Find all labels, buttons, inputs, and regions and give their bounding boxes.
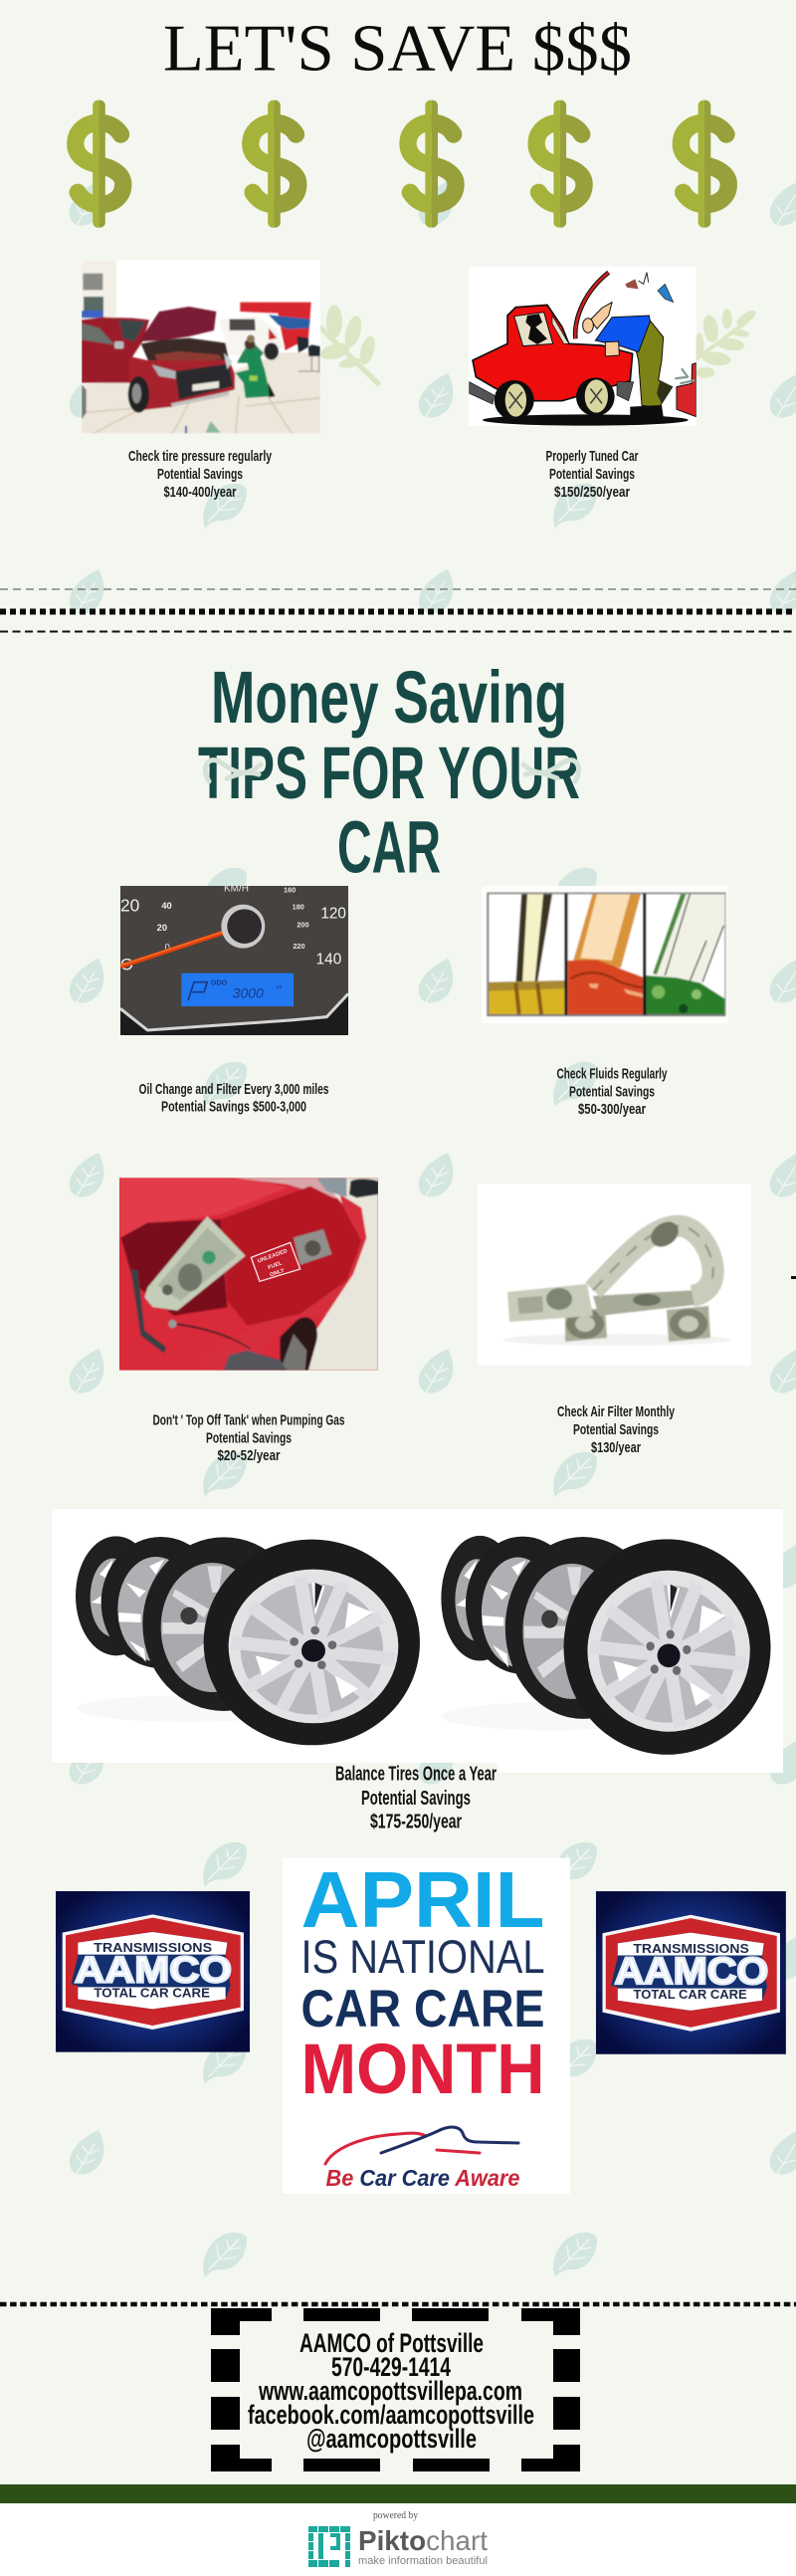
photo: odometer gauge: 0 bbox=[165, 942, 170, 952]
logo: AAMCO left: AAMCO bbox=[75, 1949, 232, 1991]
caption: air filter: $130/year bbox=[591, 1439, 641, 1456]
caption: air filter: Potential Savings bbox=[573, 1421, 659, 1438]
footer: powered by Piktochart: powered by bbox=[373, 2510, 418, 2521]
photo: three engine fluids bbox=[482, 886, 728, 1023]
contact details: @aamcopottsville bbox=[306, 2424, 477, 2454]
caption: oil change: Potential Savings $500-3,000 bbox=[161, 1099, 306, 1115]
photo: car made of money bbox=[478, 1183, 751, 1366]
poster: April is National Car Care Month: CAR CARE bbox=[300, 1980, 545, 2039]
photo background: tires white panels bbox=[52, 1509, 783, 1773]
caption: top off tank: $20-52/year bbox=[217, 1447, 281, 1464]
caption: check tire pressure: $140-400/year bbox=[163, 484, 237, 501]
photo: odometer gauge: 160 bbox=[284, 885, 296, 894]
caption: properly tuned car: $150/250/year bbox=[554, 484, 630, 501]
logo: AAMCO right: AAMCO bbox=[615, 1949, 768, 1992]
photo: odometer gauge: 220 bbox=[293, 942, 305, 951]
contact details: AAMCO of Pottsville bbox=[299, 2328, 484, 2358]
icon: left leafy branch bbox=[318, 305, 378, 383]
logo: AAMCO right: TOTAL CAR CARE bbox=[633, 1988, 747, 2002]
heading: money saving tips bbox=[198, 656, 580, 888]
caption: check tire pressure: Potential Savings bbox=[157, 466, 243, 483]
photo: odometer gauge: O bbox=[120, 955, 133, 973]
poster: April is National Car Care Month: IS NATIONAL bbox=[300, 1930, 545, 1983]
background leaf pattern bbox=[70, 181, 796, 2277]
heading: money saving tips: TIPS FOR YOUR bbox=[198, 732, 580, 814]
photo: odometer gauge: 120 bbox=[320, 905, 346, 922]
photo: odometer gauge: 20 bbox=[157, 923, 167, 933]
photo: odometer gauge: 3000 bbox=[233, 984, 264, 1000]
photo: dollar bill in fuel tank bbox=[119, 1178, 378, 1371]
photo: odometer gauge: ml bbox=[277, 985, 282, 991]
contact frame: dashed border bbox=[211, 2308, 580, 2471]
icon: dollar sign 5 bbox=[681, 101, 728, 228]
footer: powered by Piktochart: Piktochart bbox=[358, 2525, 488, 2556]
footer white area bbox=[0, 2503, 796, 2576]
caption: balance tires: $175-250/year bbox=[370, 1812, 462, 1833]
photo: dollar bill in fuel tank: ONLY bbox=[269, 1268, 286, 1278]
icon: dollar sign 2 bbox=[251, 101, 298, 228]
contact details: 570-429-1414 bbox=[331, 2352, 451, 2382]
logo: AAMCO right: TRANSMISSIONS bbox=[633, 1942, 749, 1956]
caption: top off tank: Don't ' Top Off Tank' when Pumping Gas bbox=[153, 1411, 344, 1429]
icon: dollar sign 4 bbox=[536, 101, 584, 228]
icon: dollar sign 1 bbox=[76, 101, 123, 228]
photo: dollar bill in fuel tank: UNLEADED bbox=[257, 1248, 289, 1265]
caption: properly tuned car: Properly Tuned Car bbox=[545, 448, 639, 465]
title: LET'S SAVE $$$ bbox=[163, 12, 632, 86]
heading: money saving tips: Money Saving bbox=[211, 656, 567, 739]
caption: check tire pressure bbox=[128, 448, 272, 501]
caption: balance tires bbox=[335, 1764, 497, 1833]
caption: properly tuned car: Potential Savings bbox=[549, 466, 635, 483]
logo: AAMCO left bbox=[56, 1891, 250, 2052]
photo: odometer gauge: 40 bbox=[161, 901, 172, 911]
contact details: www.aamcopottsvillepa.com bbox=[258, 2376, 522, 2406]
decorative swirl right bbox=[523, 760, 579, 781]
caption: properly tuned car bbox=[545, 448, 639, 501]
caption: top off tank bbox=[153, 1411, 344, 1464]
icon: right leafy branch bbox=[695, 308, 758, 378]
caption: check tire pressure: Check tire pressure regularly bbox=[128, 448, 272, 465]
caption: check fluids: Check Fluids Regularly bbox=[557, 1065, 668, 1083]
photo: odometer gauge: 200 bbox=[297, 921, 309, 930]
footer: powered by Piktochart: make information beautiful bbox=[358, 2555, 488, 2567]
photo: odometer gauge: 20 bbox=[120, 896, 139, 916]
logo: AAMCO right bbox=[596, 1891, 786, 2054]
photo: odometer gauge: KM/H bbox=[224, 884, 249, 895]
slogan: be car care aware: Be Car Care Aware bbox=[326, 2165, 520, 2191]
logo: car swoosh bbox=[325, 2127, 518, 2164]
contact details bbox=[248, 2328, 534, 2454]
poster: April is National Car Care Month: APRIL bbox=[300, 1855, 545, 1944]
caption: balance tires: Balance Tires Once a Year bbox=[335, 1764, 497, 1786]
photo: tire group left bbox=[76, 1536, 420, 1745]
caption: air filter: Check Air Filter Monthly bbox=[557, 1403, 675, 1420]
caption: balance tires: Potential Savings bbox=[361, 1788, 471, 1810]
footer green bar bbox=[0, 2484, 796, 2503]
contact details: facebook.com/aamcopottsville bbox=[248, 2400, 534, 2430]
caption: check fluids: $50-300/year bbox=[578, 1101, 646, 1118]
decorative swirl left bbox=[205, 760, 261, 781]
footer: powered by Piktochart bbox=[308, 2510, 488, 2567]
photo: odometer gauge: ODO bbox=[211, 978, 228, 987]
photo: dollar bill in fuel tank: FUEL bbox=[268, 1260, 284, 1271]
photo: mechanic checking red car bbox=[82, 261, 320, 434]
caption: check fluids bbox=[557, 1065, 668, 1118]
icon: Piktochart logo bbox=[308, 2526, 350, 2567]
caption: oil change: Oil Change and Filter Every 3,000 miles bbox=[139, 1081, 328, 1098]
photo: odometer gauge: 180 bbox=[293, 903, 304, 912]
caption: top off tank: Potential Savings bbox=[206, 1429, 292, 1447]
logo: AAMCO left: TOTAL CAR CARE bbox=[94, 1987, 210, 2001]
illustration: man fixing red cartoon car bbox=[469, 267, 696, 426]
caption: oil change bbox=[139, 1081, 328, 1115]
poster: April is National Car Care Month: MONTH bbox=[300, 2031, 545, 2109]
icon: dollar sign 3 bbox=[408, 101, 456, 228]
photo: odometer gauge: 140 bbox=[316, 951, 341, 967]
logo: AAMCO left: TRANSMISSIONS bbox=[94, 1941, 212, 1955]
caption: check fluids: Potential Savings bbox=[569, 1083, 655, 1101]
photo: tire group right bbox=[441, 1536, 771, 1755]
heading: money saving tips: CAR bbox=[337, 806, 441, 888]
icon row: dollar signs bbox=[76, 101, 728, 228]
photo: odometer gauge bbox=[120, 884, 348, 1035]
caption: air filter bbox=[557, 1403, 675, 1456]
poster: April is National Car Care Month bbox=[283, 1855, 570, 2194]
